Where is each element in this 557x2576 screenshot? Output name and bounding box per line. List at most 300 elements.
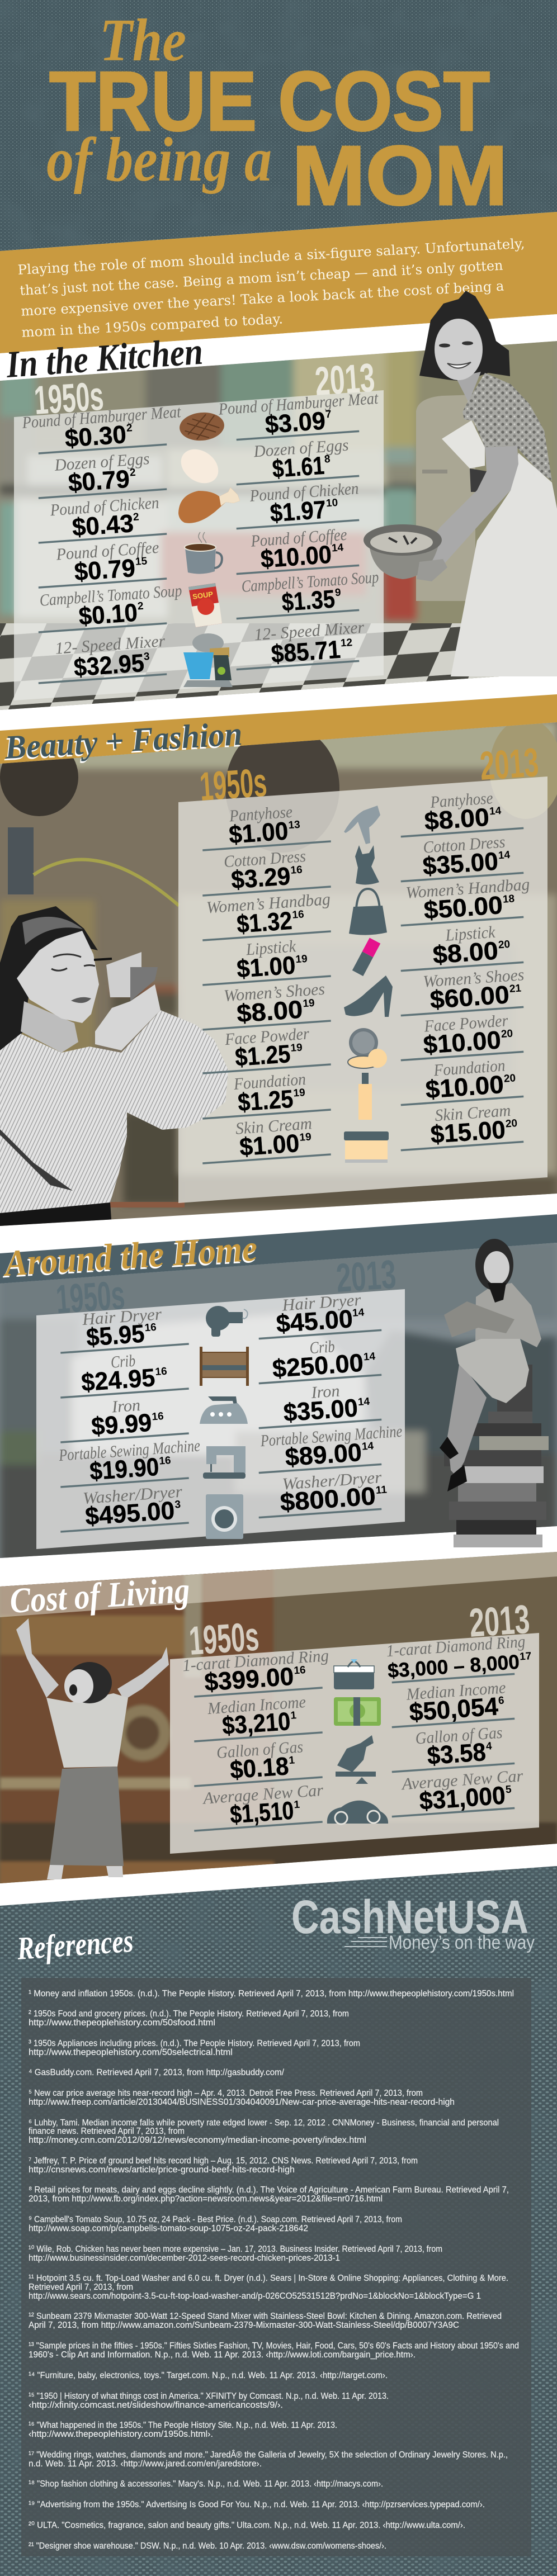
reference 2: http://www.thepeoplehistory.com/50sfood.html xyxy=(29,2018,215,2028)
row: chicken 1950s xyxy=(36,493,167,544)
reference list xyxy=(29,1989,519,2551)
row: gas 1950s: $0.18 xyxy=(229,1751,290,1784)
intro band xyxy=(0,212,557,353)
year label: 1950s cost of living: 1950s xyxy=(188,1614,261,1664)
row: chicken 1950s: 2 xyxy=(133,511,139,523)
row: new car 2013: $31,000 xyxy=(418,1781,506,1815)
row: hair dryer 2013: 14 xyxy=(352,1306,365,1319)
year label: 1950s home: 1950s xyxy=(55,1273,126,1322)
section: Beauty + Fashion xyxy=(0,694,557,1230)
icon: money stack xyxy=(334,1697,381,1726)
references panel xyxy=(21,1978,531,2556)
row: handbag 1950s xyxy=(200,890,333,941)
reference 19: ¹⁹ "Advertising from the 1950s." Advertising Is Good For You. N.p., n.d. Web. 11 Apr. 2013. ‹http://pzrservices.typepad.com/›. xyxy=(29,2500,485,2509)
row: eggs 2013 xyxy=(234,435,359,486)
reference 9 xyxy=(29,2215,402,2233)
row: foundation 2013: $10.00 xyxy=(424,1070,504,1104)
icon: burger patty xyxy=(178,411,225,442)
row: soup 1950s xyxy=(36,581,184,633)
header: leather background and title xyxy=(0,0,557,257)
fridge xyxy=(416,395,475,601)
arm xyxy=(418,446,518,565)
row: coffee 2013: 14 xyxy=(331,542,344,555)
kitchen rows: 2013 xyxy=(218,389,381,671)
row: sewing machine 2013: Portable Sewing Machine xyxy=(259,1422,403,1450)
row: soup 1950s: $0.10 xyxy=(78,598,138,631)
apron bib xyxy=(442,420,485,468)
row: median income 2013 xyxy=(389,1678,514,1728)
intro paragraph: that’s just not the case. Being a mom isn’t cheap — and it’s only gotten xyxy=(20,258,503,299)
year label: 2013 home: 2013 xyxy=(335,1252,398,1301)
reference 9: http://www.soap.com/p/campbells-tomato-soup-1075-oz-24-pack-218642 xyxy=(29,2224,308,2233)
row: shoes 2013: $60.00 xyxy=(429,980,510,1014)
reference 17 xyxy=(29,2449,508,2469)
hands and compact xyxy=(106,952,141,997)
intro paragraph: mom in the 1950s compared to today. xyxy=(21,311,284,340)
row: soup 1950s: Campbell’s Tomato Soup xyxy=(39,581,182,610)
row: median income 2013: 6 xyxy=(498,1695,504,1707)
row: face powder 1950s: Face Powder xyxy=(224,1025,310,1049)
reference 6 xyxy=(29,2118,499,2145)
row: cotton dress 2013: 14 xyxy=(498,849,511,861)
row: gas 2013 xyxy=(389,1723,514,1773)
heading: Cost of Living: Cost of Living xyxy=(9,1570,191,1621)
row: new car 2013: 5 xyxy=(505,1784,512,1796)
row: face powder 2013 xyxy=(398,1011,523,1061)
slate heading band xyxy=(0,1214,557,1284)
row: cotton dress 1950s: $3.29 xyxy=(230,861,291,894)
row: lipstick 2013: 20 xyxy=(498,939,511,951)
row: crib 1950s: 16 xyxy=(155,1366,167,1378)
woman reading on book stack xyxy=(440,1239,549,1547)
row: coffee 1950s: Pound of Coffee xyxy=(55,538,159,564)
row: foundation 1950s xyxy=(200,1068,331,1119)
reference 15: ¹⁵ "1950 | History of what things cost in America." XFINITY by Comcast. N.p., n.d. Web. 11 Apr. 2013. xyxy=(29,2392,389,2401)
icon: handbag xyxy=(349,889,387,935)
row: cotton dress 2013: Cotton Dress xyxy=(422,833,506,857)
row: foundation 2013: 20 xyxy=(503,1072,516,1085)
neck xyxy=(21,1001,78,1053)
row: foundation 1950s: $1.25 xyxy=(237,1085,294,1116)
year label: 2013 kitchen: 2013 xyxy=(314,356,376,404)
reference 2: ² 1950s Food and grocery prices. (n.d.). The People History. Retrieved April 7, 2013, from xyxy=(29,2009,349,2019)
row: lipstick 2013 xyxy=(398,921,523,972)
row: hamburger 1950s: $0.30 xyxy=(64,420,128,453)
row: gas 1950s: 1 xyxy=(289,1754,295,1767)
row: chicken 1950s: $0.43 xyxy=(71,509,135,542)
beauty rows: 1950s xyxy=(200,800,333,1164)
row: gas 2013: Gallon of Gas xyxy=(415,1723,503,1748)
row: coffee 1950s xyxy=(36,538,167,589)
icon: crib xyxy=(200,1347,249,1386)
reference 7: ⁷ Jeffrey, T. P. Price of ground beef hits record high – Aug. 15, 2012. CNS News. Retrieved April 7, 2013, from xyxy=(29,2156,418,2166)
logo: CashNetUSA: Money’s on the way xyxy=(389,1932,535,1953)
row: new car 2013 xyxy=(389,1767,526,1817)
row: hair dryer 1950s xyxy=(58,1303,189,1353)
row: median income 1950s xyxy=(191,1692,323,1742)
intro paragraph: Playing the role of mom should include a six-figure salary. Unfortunately, xyxy=(17,236,525,278)
row: face powder 1950s xyxy=(200,1023,331,1074)
row: washer dryer 1950s: $495.00 xyxy=(84,1496,176,1531)
row: washer dryer 2013: 11 xyxy=(375,1484,388,1497)
title: MOM: MOM xyxy=(292,128,508,222)
reference 7 xyxy=(29,2156,418,2175)
icon: egg xyxy=(174,442,225,490)
row: handbag 1950s: 16 xyxy=(292,908,304,921)
row: sewing machine 1950s: Portable Sewing Machine xyxy=(58,1436,201,1465)
icon: sewing machine xyxy=(203,1446,246,1479)
reference 3 xyxy=(29,2039,360,2057)
row: mixer 2013: $85.71 xyxy=(270,635,341,668)
row: coffee 2013 xyxy=(234,525,359,575)
row: skin cream 2013: Skin Cream xyxy=(434,1101,511,1125)
row: cotton dress 1950s: Cotton Dress xyxy=(223,847,306,871)
row: gas 2013: $3.58 xyxy=(426,1737,487,1770)
reference 3: ³ 1950s Appliances including prices. (n.d.). The People History. Retrieved April 7, 2013, from xyxy=(29,2039,360,2048)
section: references and logo background xyxy=(0,1862,557,2576)
row: gas 1950s xyxy=(191,1736,323,1787)
row: diamond ring 1950s: $399.00 xyxy=(204,1662,295,1697)
woman with raised arms xyxy=(16,1618,169,1879)
row: soup 2013 xyxy=(234,568,381,620)
row: shoes 1950s: 19 xyxy=(303,997,315,1010)
row: mixer 2013: 12 xyxy=(340,637,353,650)
reference 4: ⁴ GasBuddy.com. Retrieved April 7, 2013, from http://gasbuddy.com/ xyxy=(29,2068,285,2077)
row: new car 1950s xyxy=(191,1781,325,1831)
row: lipstick 1950s: $1.00 xyxy=(236,950,296,983)
reference 11: http://www.sears.com/hotpoint-3.5-cu-ft-top-load-washer-and/p-026CO52531512B?prdNo=1&blockNo=1&blockType=G 1 xyxy=(29,2291,481,2301)
icon: foundation tube xyxy=(358,1073,372,1120)
row: washer dryer 2013: $800.00 xyxy=(279,1481,376,1517)
row: median income 1950s: $3,210 xyxy=(221,1707,291,1740)
intro paragraph xyxy=(17,236,528,340)
row: chicken 2013 xyxy=(234,479,361,530)
row: face powder 1950s: $1.25 xyxy=(234,1039,291,1072)
cost rows: 1950s xyxy=(182,1646,331,1831)
reference 18: ¹⁸ "Shop fashion clothing & accessories." Macy's. N.p., n.d. Web. 11 Apr. 2013. ‹http://macys.com›. xyxy=(29,2479,383,2489)
row: face powder 2013: $10.00 xyxy=(422,1025,502,1059)
row: mixer 2013: 12- Speed Mixer xyxy=(253,618,365,644)
row: new car 2013: Average New Car xyxy=(400,1767,524,1793)
row: skin cream 2013: $15.00 xyxy=(429,1115,506,1149)
row: pantyhose 2013 xyxy=(398,787,523,837)
icon: dress xyxy=(355,845,379,885)
row: crib 1950s xyxy=(58,1348,189,1398)
icon: soup can: SOUP xyxy=(192,590,214,601)
reference 16: ‹http://www.thepeoplehistory.com/1950s.html›. xyxy=(29,2430,213,2439)
icon: car xyxy=(327,1801,388,1824)
row: washer dryer 1950s: Washer/Dryer xyxy=(82,1483,183,1508)
row: washer dryer 2013: Washer/Dryer xyxy=(282,1468,383,1494)
home rows: 1950s xyxy=(58,1303,202,1532)
reference 5: http://www.freep.com/article/20130404/BUSINESS01/304040091/New-car-price-average-hits-near-record-high xyxy=(29,2097,455,2107)
reference 3: http://www.thepeoplehistory.com/50selectrical.html xyxy=(29,2048,233,2057)
row: diamond ring 1950s xyxy=(182,1646,331,1698)
row: hamburger 1950s: 2 xyxy=(126,422,133,434)
reference 12: April 7, 2013, from http://www.amazon.com/Sunbeam-2379-Mixmaster-300-Watt-Stainless-Steel/dp/B0007Y3A9C xyxy=(29,2321,459,2330)
reference 11: Retrieved April 7, 2013, from xyxy=(29,2283,133,2292)
section: Around the Home xyxy=(0,1214,557,1565)
reference 16: ¹⁶ "What happened in the 1950s." The People History Site. N.p., n.d. Web. 11 Apr. 2013. xyxy=(29,2421,337,2430)
year label: 1950s beauty: 1950s xyxy=(199,760,268,809)
reference 7: http://cnsnews.com/news/article/price-ground-beef-hits-record-high xyxy=(29,2165,295,2175)
row: handbag 1950s: $1.32 xyxy=(236,906,293,939)
row: lipstick 2013: Lipstick xyxy=(444,923,496,945)
cost of living stats panel xyxy=(170,1633,539,1854)
row: sewing machine 1950s: $19.90 xyxy=(89,1452,160,1485)
row: pantyhose 2013: $8.00 xyxy=(423,803,490,836)
reference 2 xyxy=(29,2009,349,2028)
reference 6: ⁶ Luhby, Tami. Median income falls while poverty rate edged lower - Sep. 12, 2012 . CNNMoney - Business, financial and personal xyxy=(29,2118,499,2128)
icon: washer xyxy=(206,1494,243,1539)
intro paragraph: more expensive over the years! Take a look back at the cost of being a xyxy=(21,278,504,319)
reference 8: ⁸ Retail prices for meats, dairy and eggs decline slightly. (n.d.). The Voice of Agriculture - American Farm Bureau. Retrieved April 7, xyxy=(29,2185,509,2195)
row: handbag 2013: Women’s Handbag xyxy=(405,875,530,902)
row: handbag 2013: 18 xyxy=(502,893,515,906)
reference 8: 2013, from http://www.fb.org/index.php?action=newsroom.news&year=2012&file=nr0716.html xyxy=(29,2194,383,2204)
reference 12 xyxy=(29,2312,502,2330)
row: crib 2013: $250.00 xyxy=(271,1348,364,1383)
row: shoes 2013: 21 xyxy=(509,983,522,995)
row: coffee 1950s: 15 xyxy=(135,555,148,568)
row: sewing machine 2013: $89.00 xyxy=(284,1438,362,1471)
title: TRUE COST: TRUE COST xyxy=(49,54,490,148)
kitchen rows: 1950s xyxy=(21,402,184,684)
row: foundation 2013 xyxy=(398,1055,523,1106)
row: hamburger 2013: 7 xyxy=(325,409,332,420)
row: eggs 2013: Dozen of Eggs xyxy=(253,436,349,461)
icon: iron xyxy=(200,1396,248,1424)
row: lipstick 1950s: Lipstick xyxy=(245,937,297,959)
row: iron 1950s: Iron xyxy=(111,1396,141,1416)
row: eggs 1950s: 2 xyxy=(129,467,136,479)
row: gas 2013: 4 xyxy=(485,1740,493,1753)
reference 5 xyxy=(29,2089,455,2107)
row: cotton dress 2013: $35.00 xyxy=(422,847,499,880)
row: hair dryer 1950s: Hair Dryer xyxy=(81,1305,162,1329)
row: soup 1950s: 2 xyxy=(137,600,144,613)
row: chicken 2013: Pound of Chicken xyxy=(249,479,359,505)
blouse xyxy=(0,1010,228,1215)
row: diamond ring 1950s: 1-carat Diamond Ring xyxy=(182,1646,329,1675)
row: mixer 1950s: 3 xyxy=(143,651,150,663)
dress xyxy=(462,373,552,481)
row: chicken 1950s: Pound of Chicken xyxy=(49,494,159,519)
row: lipstick 1950s xyxy=(200,935,331,986)
beauty salon photo background xyxy=(0,718,557,1230)
reference 21: ²¹ "Designer shoe warehouse." DSW. N.p., n.d. Web. 10 Apr. 2013. ‹www.dsw.com/womens-shoes/›. xyxy=(29,2541,386,2551)
row: iron 1950s xyxy=(58,1393,189,1443)
reference 17: n.d. Web. 11 Apr. 2013. ‹http://www.jared.com/en/jaredstore›. xyxy=(29,2459,262,2469)
row: hair dryer 1950s: 16 xyxy=(144,1322,157,1334)
section: Cost of Living xyxy=(0,1549,557,1890)
reference 5: ⁵ New car price average hits near-record high – Apr. 4, 2013. Detroit Free Press. Retrieved April 7, 2013, from xyxy=(29,2089,423,2098)
heading: Beauty + Fashion: Beauty + Fashion xyxy=(3,715,243,766)
row: pantyhose 1950s xyxy=(200,800,331,851)
reference 6: finance news. Retrieved April 7, 2013, from xyxy=(29,2127,185,2136)
row: soup 2013: Campbell’s Tomato Soup xyxy=(241,568,379,596)
reference 6: http://money.cnn.com/2012/09/12/news/economy/median-income-poverty/index.html xyxy=(29,2135,366,2145)
row: hamburger 2013: $3.09 xyxy=(264,406,327,439)
icon: cream jar xyxy=(344,1131,389,1163)
row: soup 2013: $1.35 xyxy=(281,584,336,617)
row: skin cream 2013 xyxy=(398,1101,523,1151)
reference 11: ¹¹ Hotpoint 3.5 cu. ft. Top-Load Washer and 6.0 cu. ft. Dryer (n.d.). Sears | In-Store & Online Shopping: Appliances, Clothing & More. xyxy=(29,2274,508,2283)
row: hair dryer 2013 xyxy=(256,1290,381,1339)
row: eggs 2013: 8 xyxy=(324,453,331,466)
kitchen heading band xyxy=(0,314,557,381)
row: sewing machine 2013 xyxy=(256,1422,404,1474)
reference 15 xyxy=(29,2392,389,2410)
row: chicken 2013: $1.97 xyxy=(269,495,327,527)
row: skin cream 1950s xyxy=(200,1113,331,1164)
row: foundation 1950s: 19 xyxy=(293,1087,305,1100)
row: handbag 2013 xyxy=(398,875,532,926)
row: washer dryer 2013 xyxy=(256,1468,389,1518)
icon: powder compact xyxy=(348,1028,387,1068)
row: skin cream 1950s: $1.00 xyxy=(239,1129,300,1161)
title: of being a: of being a xyxy=(46,125,272,195)
row: hair dryer 1950s: $5.95 xyxy=(86,1319,145,1352)
beauty stats panel xyxy=(178,776,547,1203)
gold heading band xyxy=(0,694,557,764)
icon: coffee mug xyxy=(185,532,222,574)
icon: lipstick xyxy=(352,937,380,976)
row: face powder 1950s: 19 xyxy=(290,1041,303,1054)
row: crib 2013 xyxy=(256,1334,381,1384)
icon: stand mixer xyxy=(183,633,233,687)
bowl xyxy=(369,543,439,579)
heading: References: References xyxy=(16,1922,134,1967)
row: eggs 1950s: $0.79 xyxy=(67,465,131,497)
reference 15: ‹http://xfinity.comcast.net/slideshow/finance-americancosts/9/›. xyxy=(29,2400,283,2410)
row: coffee 2013: $10.00 xyxy=(259,540,332,574)
row: median income 2013: $50,054 xyxy=(408,1692,499,1726)
row: crib 1950s: Crib xyxy=(110,1352,136,1372)
reference 17: ¹⁷ "Wedding rings, watches, diamonds and more." JaredÂ® the Galleria of Jewelry, 5X the selection of Ordinary Jewelry Stores. N.p., xyxy=(29,2449,508,2460)
row: iron 2013 xyxy=(256,1379,381,1429)
row: diamond ring 2013 xyxy=(386,1632,532,1683)
face xyxy=(17,931,99,1023)
row: eggs 2013: $1.61 xyxy=(271,451,325,483)
row: iron 2013: 14 xyxy=(357,1396,370,1408)
reference 14: ¹⁴ "Furniture, baby, electronics, toys." Target.com. N.p., n.d. Web. 11 Apr. 2013. ‹http://target.com›. xyxy=(29,2371,388,2380)
apron skirt xyxy=(451,453,557,676)
row: pantyhose 1950s: $1.00 xyxy=(228,816,289,849)
heading: In the Kitchen: In the Kitchen xyxy=(4,330,204,386)
row: pantyhose 2013: Pantyhose xyxy=(429,789,493,812)
row: diamond ring 2013: 1-carat Diamond Ring xyxy=(386,1632,526,1660)
year label: 1950s kitchen: 1950s xyxy=(33,374,105,423)
row: shoes 2013 xyxy=(398,965,526,1016)
skirt xyxy=(0,1202,112,1228)
row: hamburger 1950s xyxy=(21,402,183,456)
icon: hair dryer xyxy=(206,1306,248,1337)
row: iron 2013: $35.00 xyxy=(282,1393,358,1427)
section: In the Kitchen xyxy=(0,291,557,716)
row: shoes 1950s: $8.00 xyxy=(236,995,304,1028)
row: hair dryer 2013: Hair Dryer xyxy=(281,1291,362,1315)
row: mixer 2013 xyxy=(233,618,367,671)
row: hamburger 2013 xyxy=(218,389,381,442)
row: median income 1950s: 1 xyxy=(290,1710,297,1722)
heading: Beauty + Fashion: Beauty + Fashion xyxy=(2,717,242,768)
row: crib 1950s: $24.95 xyxy=(81,1363,156,1396)
row: hamburger 1950s: Pound of Hamburger Meat xyxy=(21,402,182,432)
icon: legs xyxy=(344,806,380,844)
neck xyxy=(456,372,481,402)
row: sewing machine 1950s: 16 xyxy=(159,1455,171,1467)
kitchen photo background xyxy=(0,335,557,716)
reference 16 xyxy=(29,2421,337,2439)
row: crib 2013: 14 xyxy=(363,1351,376,1363)
icon: chicken leg xyxy=(178,487,240,523)
icon: soup can xyxy=(188,583,222,627)
row: shoes 1950s: Women’s Shoes xyxy=(223,980,325,1005)
row: foundation 1950s: Foundation xyxy=(233,1070,306,1093)
row: skin cream 1950s: Skin Cream xyxy=(235,1114,313,1138)
row: mixer 1950s: 12- Speed Mixer xyxy=(54,632,166,658)
reference 13: 1960's - Clip Art and Information. N.p., n.d. Web. 11 Apr. 2013. ‹http://www.loti.com/bargain_price.htm›. xyxy=(29,2350,416,2360)
reference 1: ¹ Money and inflation 1950s. (n.d.). The People History. Retrieved April 7, 2013, from http://www.thepeoplehistory.com/1950s.html xyxy=(29,1989,514,1999)
row: sewing machine 2013: 14 xyxy=(361,1440,374,1453)
reference 10: ¹⁰ Wile, Rob. Chicken has never been more expensive – Jan. 17, 2013. Business Insider. Retrieved April 7, 2013, from xyxy=(29,2244,442,2254)
icon: gas pump nozzle xyxy=(336,1735,376,1784)
row: cotton dress 1950s xyxy=(200,845,331,896)
icon: high heel shoe xyxy=(344,976,393,1017)
hair xyxy=(0,906,98,1050)
row: coffee 2013: Pound of Coffee xyxy=(250,525,347,551)
row: hair dryer 2013: $45.00 xyxy=(275,1304,353,1338)
row: median income 1950s: Median Income xyxy=(206,1693,306,1718)
hair dryer domes xyxy=(0,758,78,816)
heading: Around the Home: Around the Home xyxy=(2,1228,258,1284)
row: washer dryer 1950s: 3 xyxy=(174,1499,181,1511)
row: cotton dress 2013 xyxy=(398,832,523,882)
reference 11 xyxy=(29,2274,508,2301)
row: pantyhose 1950s: 13 xyxy=(288,819,300,831)
row: eggs 1950s xyxy=(36,448,167,499)
row: eggs 1950s: Dozen of Eggs xyxy=(54,449,150,475)
row: pantyhose 1950s: Pantyhose xyxy=(228,803,293,826)
heading: Around the Home: Around the Home xyxy=(1,1230,257,1286)
row: diamond ring 1950s: 16 xyxy=(294,1664,306,1677)
kitchen stats panel xyxy=(14,390,384,700)
row: cotton dress 1950s: 16 xyxy=(290,864,303,877)
row: shoes 1950s xyxy=(200,979,331,1030)
reference 20: ²⁰ ULTA. "Cosmetics, fragrance, salon and beauty gifts." Ulta.com. N.p., n.d. Web. 11 Apr. 2013. ‹http://www.ulta.com/›. xyxy=(29,2521,465,2530)
reference 10: http://www.businessinsider.com/december-2012-sees-record-chicken-prices-2013-1 xyxy=(29,2253,340,2263)
reference 9: ⁹ Campbell's Tomato Soup, 10.75 oz, 24 Pack - Best Price. (n.d.). Soap.com. Retrieved April 7, 2013, from xyxy=(29,2215,402,2224)
row: shoes 2013: Women’s Shoes xyxy=(422,965,525,991)
row: handbag 1950s: Women’s Handbag xyxy=(206,890,331,917)
home stats panel xyxy=(36,1289,405,1549)
hair xyxy=(419,291,510,381)
row: foundation 2013: Foundation xyxy=(433,1057,506,1079)
icon: ring box xyxy=(334,1659,374,1689)
row: lipstick 2013: $8.00 xyxy=(432,936,499,969)
row: new car 1950s: 1 xyxy=(294,1799,300,1811)
woman with bowl xyxy=(364,291,557,676)
row: face powder 2013: 20 xyxy=(501,1028,513,1040)
reference 13 xyxy=(29,2341,519,2360)
row: skin cream 1950s: 19 xyxy=(299,1131,311,1144)
row: iron 1950s: 16 xyxy=(152,1410,164,1423)
row: iron 1950s: $9.99 xyxy=(91,1408,153,1441)
radio photo background xyxy=(0,1549,557,1890)
row: hamburger 2013: Pound of Hamburger Meat xyxy=(218,389,379,419)
reference 10 xyxy=(29,2244,442,2263)
